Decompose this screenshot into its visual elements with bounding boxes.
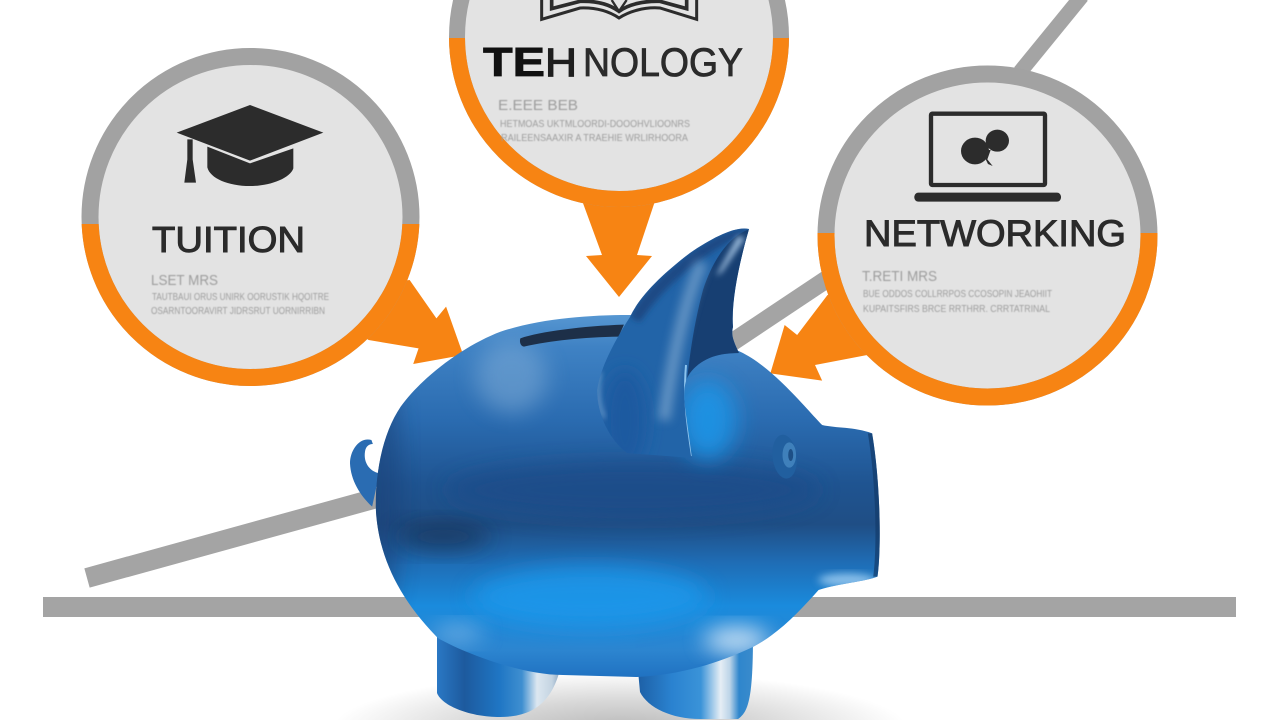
- text block: tuition details: [151, 272, 329, 317]
- heading: technology: TE: [483, 39, 545, 85]
- ear: [597, 228, 749, 456]
- arrow: networking into piggy bank: [770, 287, 897, 381]
- text block: networking details: T.RETI MRS: [862, 268, 937, 285]
- tail: [350, 439, 379, 507]
- text block: technology details: E.EEE BEB: [498, 97, 578, 114]
- text block: tuition details: TAUTBAUI ORUS UNIRK OORUSTIK HQOITRE: [152, 292, 329, 303]
- text block: technology details: [498, 97, 690, 144]
- text block: networking details: [862, 268, 1052, 315]
- heading: technology: NOLOGY: [583, 41, 743, 85]
- icon: laptop with chat bubbles: [914, 114, 1061, 202]
- text block: tuition details: OSARNTOORAVIRT JIDRSRUT UORNIRRIBN: [151, 306, 325, 317]
- eye: [770, 434, 799, 480]
- arrow: tuition into piggy bank: [340, 280, 463, 364]
- body: [351, 310, 890, 680]
- heading: networking: NETWORKING: [864, 213, 1126, 254]
- text block: networking details: KUPAITSFIRS BRCE RRTHRR. CRRTATRINAL: [863, 304, 1050, 315]
- panel: networking: [826, 74, 1149, 397]
- panel: tuition: [90, 56, 411, 378]
- heading: tuition: TUITION: [152, 219, 305, 260]
- floor shadow under piggy bank: [320, 600, 920, 720]
- illustration: blue piggy bank: [350, 225, 890, 719]
- right front leg: [637, 635, 753, 719]
- chart: rising trend line and baseline: [43, 0, 1236, 607]
- left front leg: [437, 625, 562, 717]
- heading: technology: [483, 39, 743, 85]
- text block: technology details: HETMOAS UKTMLOORDI-DOOOHVLIOONRS: [500, 118, 690, 130]
- panel: technology: [457, 0, 781, 199]
- text block: networking details: BUE ODDOS COLLRRPOS CCOSOPIN JEAOHIIT: [863, 289, 1052, 300]
- heading: technology: H: [545, 41, 577, 85]
- text block: tuition details: LSET MRS: [151, 272, 218, 289]
- text block: technology details: RAILEENSAAXIR A TRAEHIE WRLIRHOORA: [501, 132, 688, 144]
- coin slot: [520, 325, 624, 347]
- icon: open book: [542, 0, 697, 19]
- arrow: technology into piggy bank: [580, 195, 657, 297]
- icon: graduation cap: [177, 105, 323, 186]
